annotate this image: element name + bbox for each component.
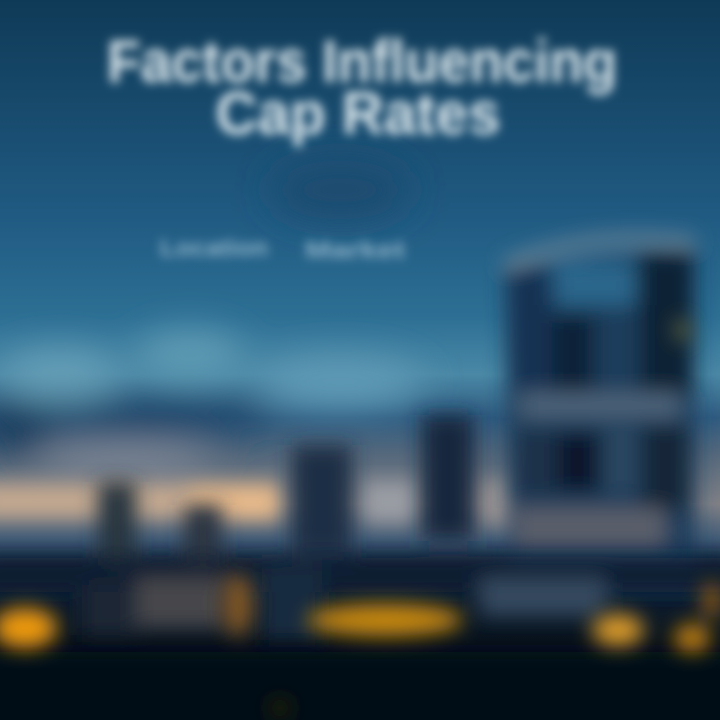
title: Factors Influencing <box>107 28 617 95</box>
sunset band <box>0 482 515 524</box>
faint subtitle labels: Market <box>305 237 405 264</box>
city lights <box>0 318 720 716</box>
title <box>107 28 617 147</box>
faint subtitle labels <box>160 235 405 264</box>
distant buildings <box>0 415 720 640</box>
title: Cap Rates <box>216 80 500 147</box>
main tower <box>505 238 695 590</box>
ground <box>0 652 720 720</box>
faint subtitle labels: Location <box>160 235 268 262</box>
clouds and horizon glow <box>0 160 425 470</box>
